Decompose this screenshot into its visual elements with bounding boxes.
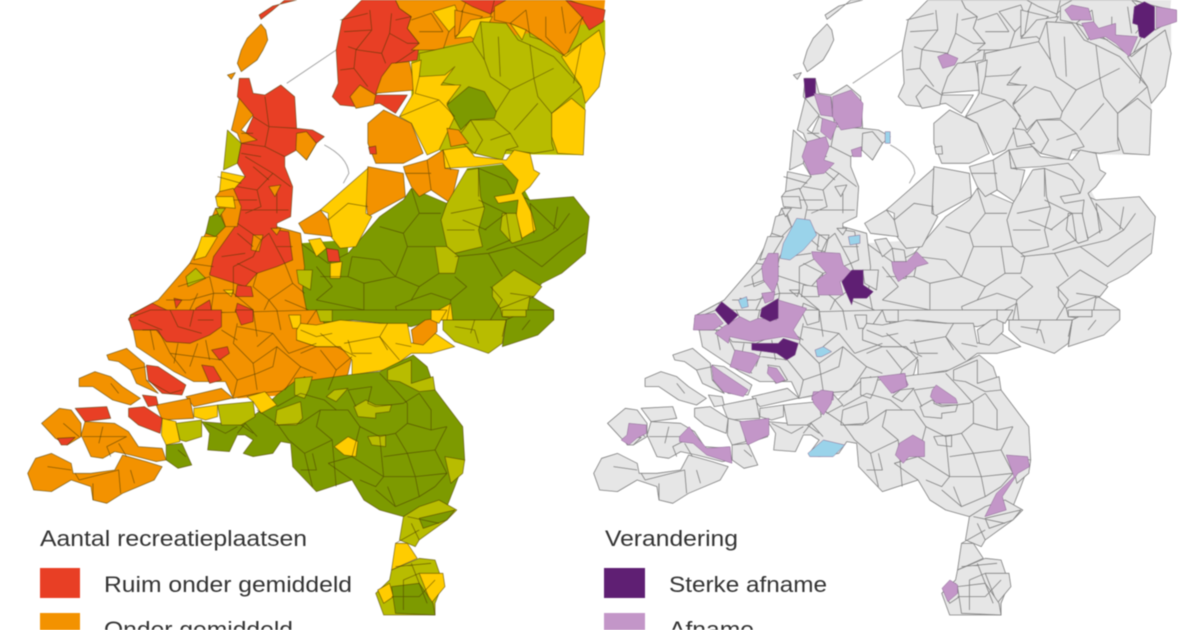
- legend heading: Verandering: [605, 526, 738, 551]
- legend: number of recreation sites: [40, 526, 352, 630]
- overlay: Randstad municipalities with change: [693, 218, 928, 400]
- panel: right map, change in recreation sites: [594, 0, 1177, 615]
- legend heading: Aantal recreatieplaatsen: [40, 526, 307, 551]
- swatch: decrease: [604, 613, 645, 630]
- label: strong decrease: Sterke afname: [669, 572, 827, 597]
- panel: left map, number of recreation sites: [28, 0, 605, 615]
- overlay: northern municipalities with change: [802, 2, 1177, 175]
- map regions: southern Netherlands: [28, 310, 554, 615]
- swatch: strong decrease: [604, 568, 645, 598]
- swatch: below average: [40, 613, 80, 630]
- legend: change: [604, 526, 827, 630]
- label: well below average: Ruim onder gemiddeld: [104, 572, 352, 597]
- overlay: southern municipalities with change: [621, 373, 1030, 602]
- swatch: well below average: [40, 568, 80, 598]
- map regions: northern and central Netherlands: [129, 0, 605, 320]
